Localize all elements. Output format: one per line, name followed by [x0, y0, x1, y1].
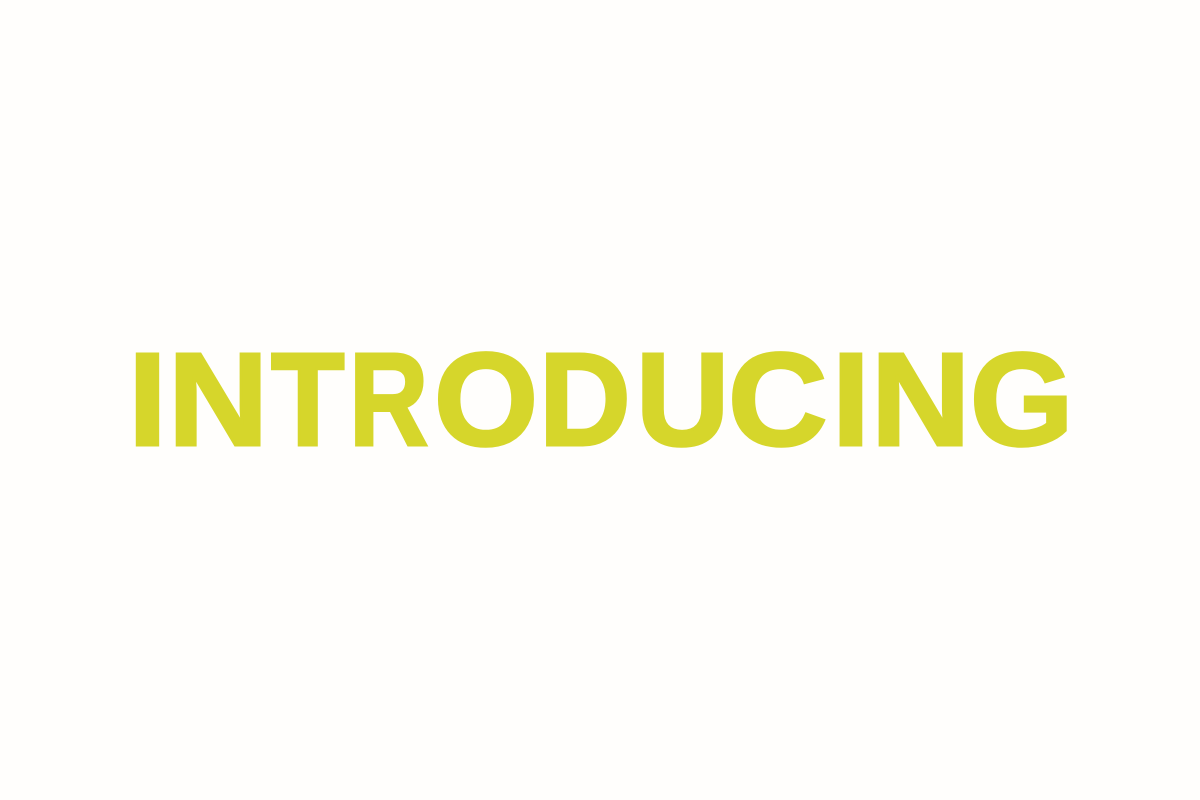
title: G — [970, 326, 1073, 474]
title: I — [128, 326, 167, 474]
title: N — [168, 326, 268, 474]
title: I — [832, 326, 869, 474]
title: N — [870, 326, 970, 474]
title: R — [349, 326, 428, 474]
title: T — [271, 326, 344, 474]
title: U — [636, 326, 729, 474]
title: C — [728, 326, 828, 474]
title: D — [539, 326, 631, 474]
title: O — [434, 326, 538, 474]
title — [128, 326, 1073, 474]
